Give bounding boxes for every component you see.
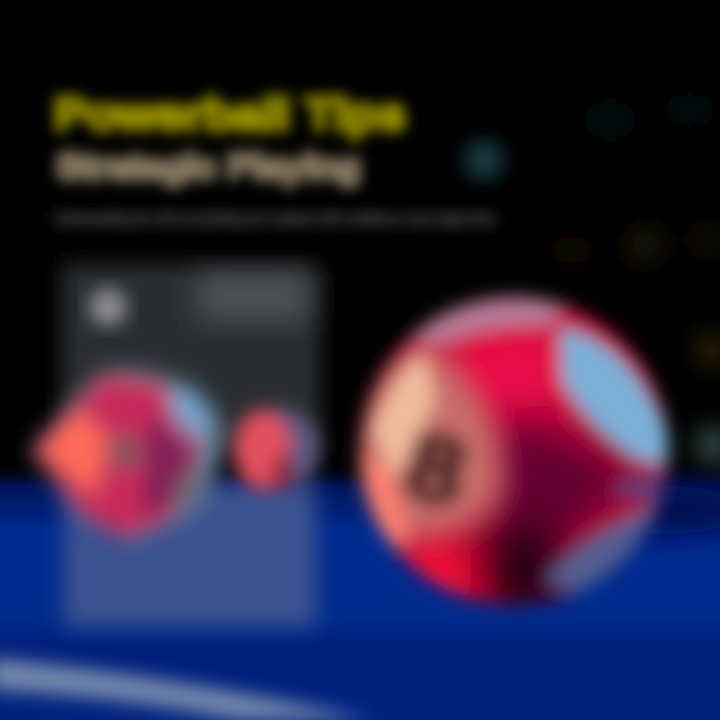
dark centre <box>273 455 293 489</box>
title block <box>54 88 495 228</box>
subtitle: Strategic Playing <box>56 146 361 187</box>
salmon edge <box>355 450 410 545</box>
light left patch <box>38 408 108 496</box>
red face <box>234 410 290 490</box>
card upper section <box>62 264 320 454</box>
icon: round badge <box>89 288 127 326</box>
card text block <box>198 274 308 320</box>
blue highlight <box>161 377 219 443</box>
blue table surface <box>0 460 720 720</box>
ball body <box>30 369 221 540</box>
white table stripe <box>0 658 370 720</box>
pale left patch <box>345 345 500 538</box>
card lower section <box>64 485 316 627</box>
blue panel upper right <box>560 328 680 465</box>
number: 8 <box>395 410 477 528</box>
small ball one <box>30 369 221 540</box>
red face <box>34 374 202 538</box>
teal decorative dot <box>463 139 505 181</box>
ball shell <box>350 290 680 620</box>
cream highlight <box>372 355 435 480</box>
small ball two <box>234 408 320 492</box>
right-side bokeh lights <box>558 94 720 461</box>
top pink rim <box>400 293 565 345</box>
lower right grey-blue patch <box>545 505 660 600</box>
lower grey highlight <box>171 463 213 517</box>
ball shell <box>236 408 320 492</box>
right table shadow <box>570 486 720 534</box>
number <box>108 436 140 468</box>
panel: info card <box>62 264 320 627</box>
main crimson shading <box>400 330 650 620</box>
title: Powerball Tips <box>54 88 406 140</box>
big ball <box>345 290 680 620</box>
dark right shading <box>140 410 198 515</box>
purple seam <box>610 468 675 510</box>
